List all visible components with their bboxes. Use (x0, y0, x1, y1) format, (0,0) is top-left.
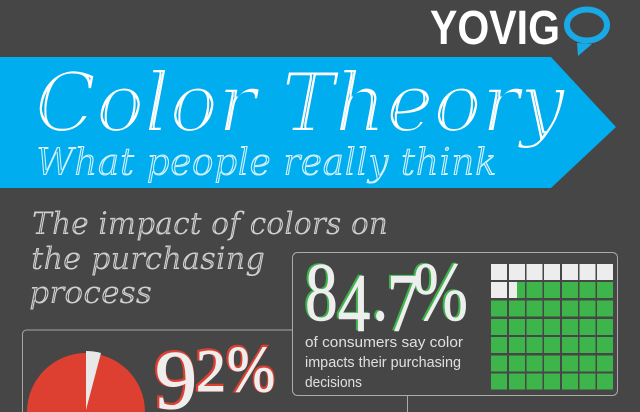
panel: 84.7 percent (292, 245, 618, 396)
heading: impact of colors: process (29, 275, 152, 311)
stat: 92%: 2 (195, 337, 225, 403)
pie chart (27, 351, 145, 412)
subtitle: What people really think (36, 140, 497, 184)
banner arrow (0, 57, 616, 188)
stat: 92%: % (227, 333, 275, 406)
logo: Yovigo: YOVIG (430, 2, 560, 55)
stat: 92% (154, 332, 275, 412)
description text: decisions (305, 375, 362, 391)
stat: 92%: % (226, 332, 275, 405)
heading: impact of colors (29, 206, 388, 311)
description text: impacts their purchasing (305, 355, 461, 371)
stat: 92%: 2 (196, 338, 226, 404)
connector line (406, 396, 408, 412)
heading: impact of colors: The impact of colors on (32, 206, 388, 242)
stat: 84.7%: 84.7% (305, 246, 468, 350)
description text: of consumers say color (305, 335, 463, 351)
panel: 92 percent (22, 330, 292, 412)
heading: impact of colors: the purchasing (31, 241, 265, 277)
description text (305, 335, 463, 391)
waffle chart (491, 264, 613, 390)
stat: 84.7%: 84.7% (303, 245, 466, 349)
title: Color Theory (35, 57, 566, 151)
